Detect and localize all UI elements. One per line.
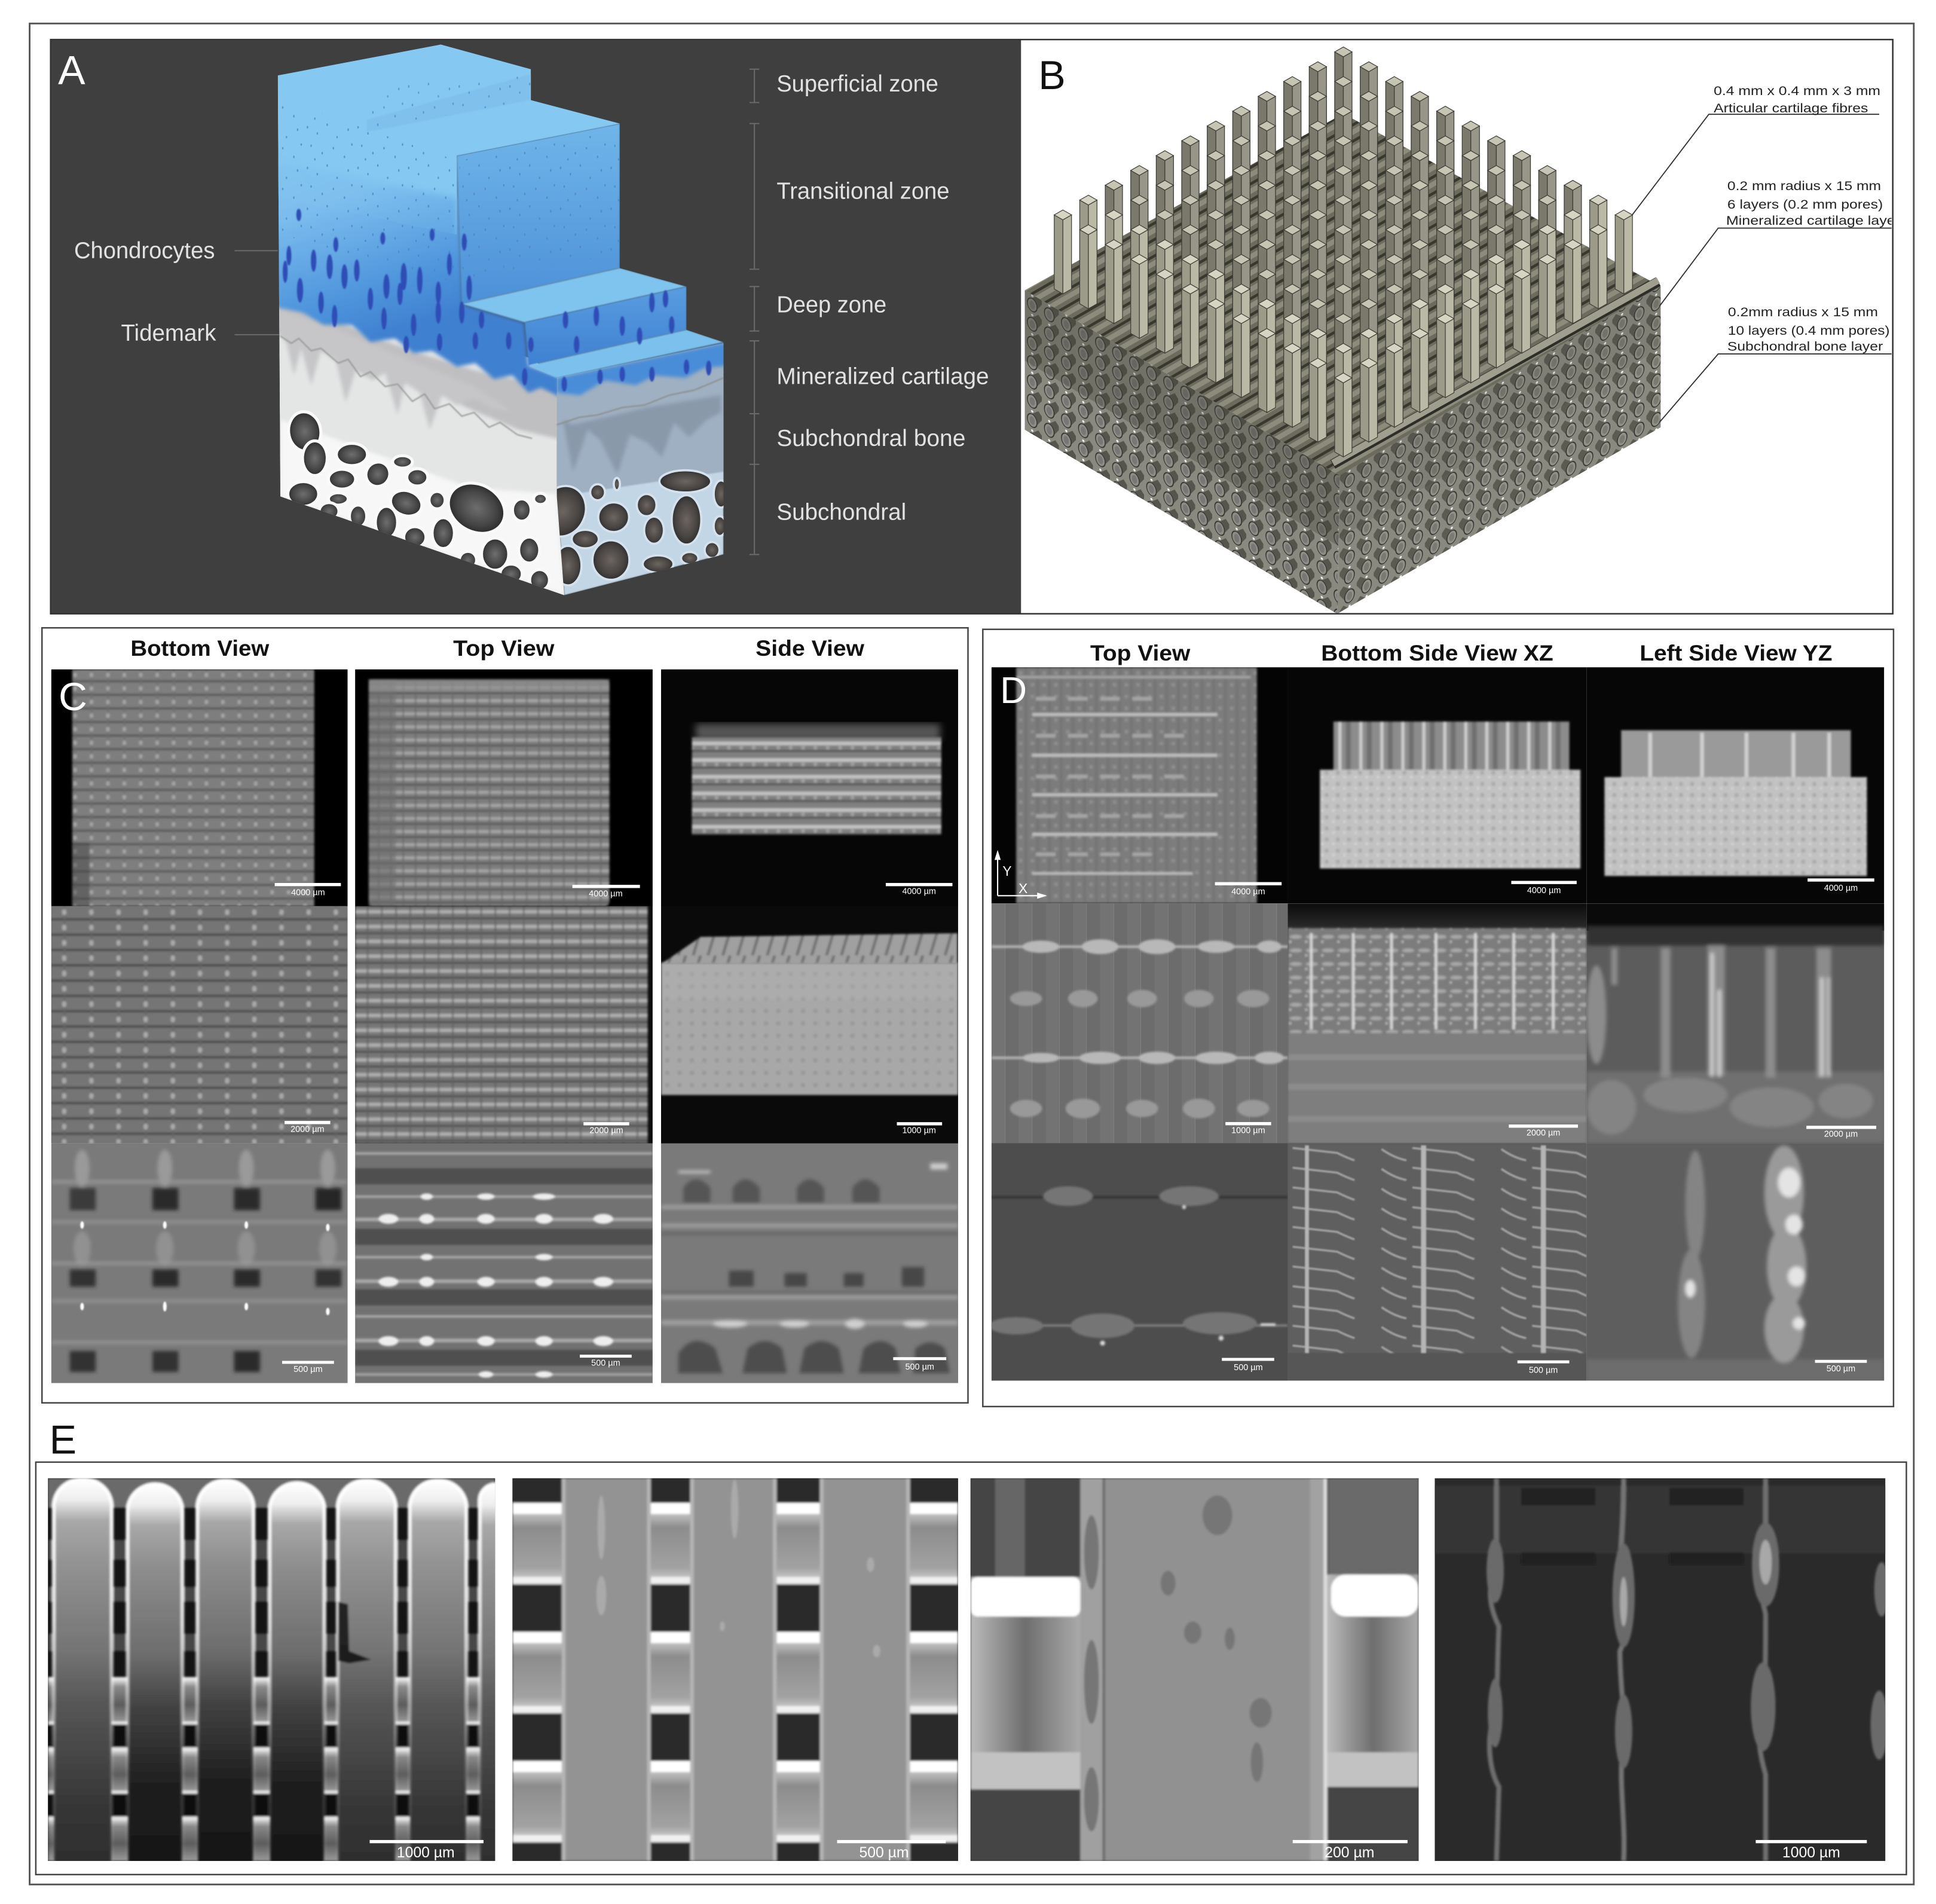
micrograph: top view 4000 um: 4000 µm (589, 890, 623, 899)
micrograph: bottom view 4000 um: C (59, 675, 87, 719)
micrograph: left side view YZ 4000 um: 4000 µm (1824, 884, 1858, 893)
micrograph: side view 4000 um (661, 670, 958, 906)
callout: articular cartilage fibres: Articular cartilage fibres (1714, 100, 1868, 115)
micrograph: top view 500 um: 500 µm (1234, 1363, 1263, 1373)
micrograph: bottom view 2000 um (51, 906, 348, 1144)
subchondral trabecular bone, side face (557, 469, 723, 595)
title: Left Side View YZ: Left Side View YZ (1640, 640, 1832, 665)
axes: X and Y arrows: Y (1002, 863, 1011, 879)
subchondral trabecular bone, front face (280, 409, 564, 595)
micrograph: bottom side view XZ 2000 um (1287, 903, 1586, 1143)
label: Tidemark: Tidemark (121, 320, 216, 346)
micrograph: bottom side view XZ 500 um: 500 µm (1529, 1365, 1558, 1375)
callout: mineralized cartilage layer: 0.2 mm radius x 15 mm (1727, 178, 1881, 193)
micrograph: bottom side view XZ 4000 um (1287, 667, 1586, 904)
micrograph: bottom view 500 um: 500 µm (293, 1365, 323, 1374)
title: Bottom Side View XZ: Bottom Side View XZ (1321, 640, 1553, 665)
panel A: cartilage zones diagram (51, 39, 1021, 614)
label: Superficial zone: Superficial zone (776, 71, 938, 97)
callout: subchondral bone layer (1659, 304, 1892, 423)
label: Transitional zone: Transitional zone (776, 178, 950, 204)
zone bracket lines (234, 69, 759, 555)
micrograph: side view 500 um: 500 µm (906, 1362, 934, 1372)
micrograph: bottom view 2000 um: 2000 µm (290, 1125, 325, 1135)
panel C: stereomicroscope views of scaffold (42, 628, 968, 1403)
micrograph: left side view YZ 500 um (1586, 1143, 1884, 1382)
SEM image: 1000 um wavy fibres (1435, 1478, 1889, 1861)
micrograph: bottom side view XZ 2000 um: 2000 µm (1527, 1129, 1560, 1138)
callout: articular cartilage fibres (1632, 83, 1880, 215)
micrograph: top view 4000 um: D (1000, 670, 1027, 711)
label: Subchondral: Subchondral (776, 499, 906, 525)
micrograph: bottom view 500 um (51, 1144, 348, 1383)
SEM image: 1000 um pillars (48, 1478, 516, 1892)
SEM image: 500 um pillars: 500 µm (859, 1845, 909, 1861)
micrograph: side view 4000 um: 4000 µm (902, 887, 936, 897)
callout: mineralized cartilage layer (1659, 178, 1900, 306)
title: Top View: Top View (453, 635, 555, 661)
axes: X and Y arrows: X (1019, 881, 1027, 896)
vertical cartilage fibres (1054, 47, 1632, 457)
frame of panels A and B (51, 39, 1893, 614)
micrograph: top view 2000 um: 2000 µm (589, 1126, 623, 1136)
lattice block (1022, 114, 1663, 616)
micrograph: top view 4000 um (991, 667, 1287, 904)
title: Top View: Top View (1090, 640, 1190, 665)
micrograph: bottom side view XZ 4000 um: 4000 µm (1527, 886, 1561, 896)
chondrocyte cells (283, 209, 711, 392)
SEM image: 1000 um wavy fibres: 1000 µm (1782, 1845, 1840, 1861)
panel B: scaffold CAD model (1021, 39, 1900, 616)
heading B: B (1038, 53, 1066, 98)
callout: subchondral bone layer: 10 layers (0.4 mm pores) (1728, 323, 1890, 338)
micrograph: left side view YZ 4000 um (1586, 667, 1884, 904)
micrograph: top view 4000 um: 4000 µm (1231, 887, 1265, 897)
callout: mineralized cartilage layer: 6 layers (0.2 mm pores) (1727, 197, 1883, 212)
micrograph: top view 2000 um (355, 906, 653, 1144)
osteochondral block illustration (257, 44, 729, 595)
micrograph: side view 1000 um (661, 906, 958, 1144)
label: Chondrocytes: Chondrocytes (74, 237, 215, 264)
label: Subchondral bone: Subchondral bone (776, 425, 965, 451)
SEM image: 1000 um pillars: 1000 µm (397, 1845, 455, 1861)
micrograph: side view 1000 um: 1000 µm (902, 1126, 936, 1136)
SEM image: 200 um single pillar: 200 µm (1325, 1845, 1374, 1861)
micrograph: left side view YZ 2000 um: 2000 µm (1824, 1130, 1858, 1139)
micrograph: bottom side view XZ 500 um (1287, 1143, 1586, 1381)
callout: mineralized cartilage layer: Mineralized cartilage layer (1726, 213, 1900, 228)
micrograph: top view 1000 um (991, 904, 1287, 1143)
micrograph: bottom view 4000 um: 4000 µm (291, 888, 325, 898)
micrograph: left side view YZ 2000 um (1586, 903, 1884, 1143)
micrograph: bottom view 4000 um (51, 670, 348, 906)
SEM image: 200 um single pillar (971, 1478, 1418, 1861)
label: Mineralized cartilage: Mineralized cartilage (776, 363, 989, 389)
micrograph: top view 4000 um (355, 670, 653, 906)
callout: subchondral bone layer: Subchondral bone layer (1727, 339, 1883, 354)
callout: subchondral bone layer: 0.2mm radius x 15 mm (1728, 304, 1878, 319)
label: Deep zone: Deep zone (776, 292, 886, 318)
micrograph: top view 500 um: 500 µm (591, 1359, 620, 1368)
heading A: A (58, 48, 85, 93)
axes: X and Y arrows (995, 850, 1047, 898)
SEM image: 500 um pillars (512, 1478, 958, 1861)
micrograph: side view 500 um (661, 1144, 958, 1383)
micrograph: top view 500 um (991, 1143, 1287, 1381)
micrograph: top view 500 um (355, 1144, 653, 1383)
title: Side View: Side View (756, 635, 864, 661)
panel D: fluorescence microscope views (983, 629, 1894, 1407)
callout: articular cartilage fibres: 0.4 mm x 0.4 mm x 3 mm (1714, 83, 1880, 98)
heading E: E (50, 1417, 77, 1462)
micrograph: left side view YZ 500 um: 500 µm (1827, 1364, 1855, 1374)
micrograph: top view 1000 um: 1000 µm (1231, 1126, 1265, 1136)
panel E: scanning electron micrographs (36, 1462, 1906, 1892)
title: Bottom View: Bottom View (130, 635, 269, 661)
